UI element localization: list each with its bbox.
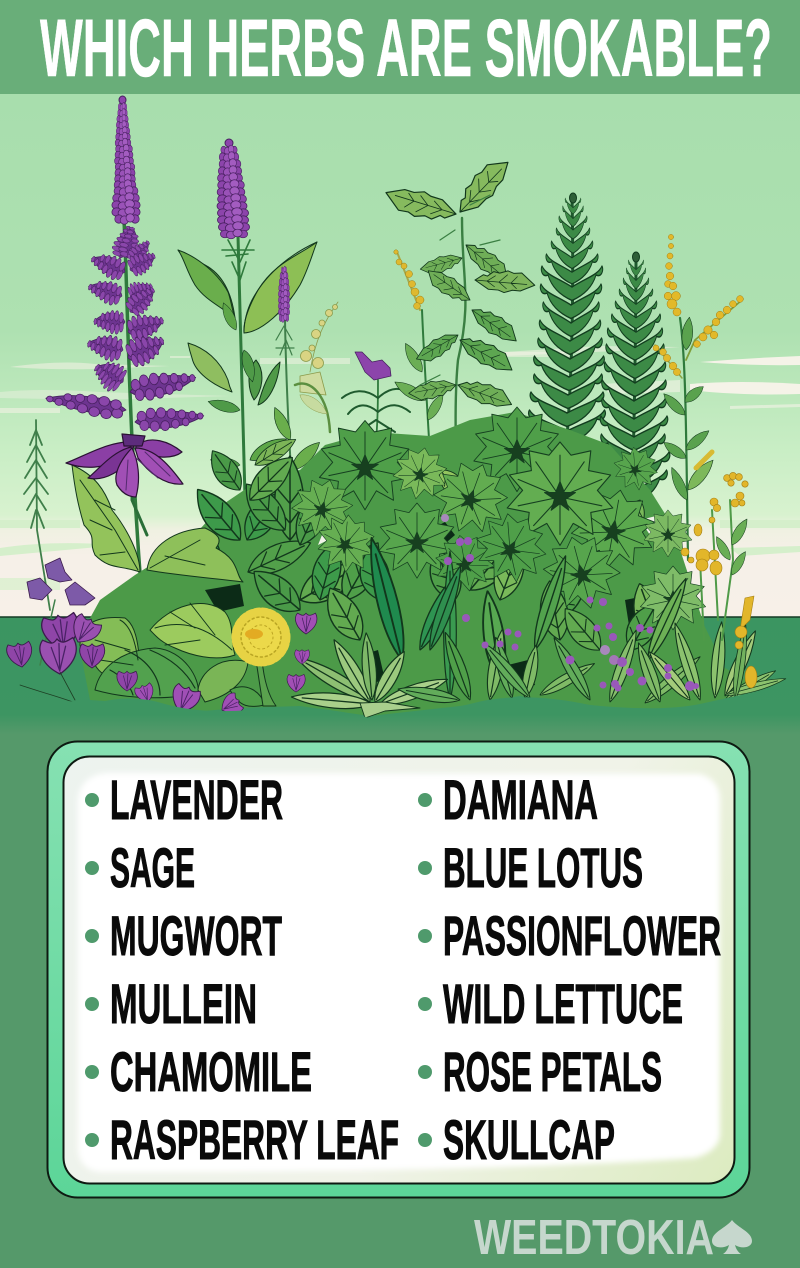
plant: nettle xyxy=(382,152,536,500)
ground xyxy=(0,617,800,1268)
title band xyxy=(0,0,800,94)
large lime leaves lower left xyxy=(80,603,265,706)
purple flowers lower left xyxy=(6,558,317,719)
grass fans at base xyxy=(291,621,787,718)
list item: Raspberry Leaf xyxy=(85,1108,399,1171)
sky gaps in foliage xyxy=(318,480,665,545)
list item: Mugwort xyxy=(85,904,282,967)
plant: small purple cluster with leaves xyxy=(342,352,412,440)
yellow flowers right xyxy=(681,472,757,688)
list item: Sage: SAGE xyxy=(110,836,195,899)
list item: Blue Lotus: BLUE LOTUS xyxy=(443,836,643,899)
large blade leaves xyxy=(362,535,692,700)
list item: Skullcap xyxy=(418,1108,615,1171)
plant: tall yellow-tipped stalk xyxy=(392,250,447,490)
plant: tall purple spike xyxy=(44,96,204,600)
list item: Lavender xyxy=(85,768,283,831)
list item: Raspberry Leaf: RASPBERRY LEAF xyxy=(110,1108,399,1171)
dandelion flower xyxy=(236,612,286,706)
list item: Damiana xyxy=(418,768,598,831)
list item: Skullcap: SKULLCAP xyxy=(443,1108,615,1171)
plant: dark fern right xyxy=(596,252,670,510)
list item: Chamomile: CHAMOMILE xyxy=(110,1040,312,1103)
ground curve overlay under plants xyxy=(0,684,800,740)
list item: Wild Lettuce xyxy=(418,972,683,1035)
list item: Mullein xyxy=(85,972,257,1035)
small purple flowers right xyxy=(441,514,699,692)
watermark: WeedTokia: WEEDTOKIA xyxy=(474,1211,714,1265)
left mid leaves xyxy=(72,447,243,582)
background sky xyxy=(0,94,800,620)
list panel xyxy=(48,742,750,1198)
illustration: herb garden xyxy=(6,96,787,719)
list item: Blue Lotus xyxy=(418,836,643,899)
icon: spade xyxy=(712,1220,752,1254)
palmate leaves xyxy=(286,407,706,630)
plant: second purple spike with leaves xyxy=(178,139,317,610)
list item: Mullein: MULLEIN xyxy=(110,972,257,1035)
plant: pale yellow sprig xyxy=(295,302,338,432)
list item: Mugwort: MUGWORT xyxy=(110,904,282,967)
big purple flower xyxy=(66,434,183,497)
plant: third thin purple spike xyxy=(264,266,324,540)
list item: Rose Petals xyxy=(418,1040,662,1103)
dark shadows xyxy=(205,522,652,690)
plant: small wild grass sprig at left xyxy=(24,420,50,610)
list item: Damiana: DAMIANA xyxy=(443,768,598,831)
cloud streaks xyxy=(0,346,800,590)
list item: Chamomile xyxy=(85,1040,312,1103)
leaf field xyxy=(186,433,673,658)
list item: Lavender: LAVENDER xyxy=(110,768,283,831)
foliage mass xyxy=(78,412,760,716)
list item: Sage xyxy=(85,836,195,899)
plant: yellow stalks right xyxy=(653,234,743,560)
plant: dark fern left xyxy=(529,193,605,450)
